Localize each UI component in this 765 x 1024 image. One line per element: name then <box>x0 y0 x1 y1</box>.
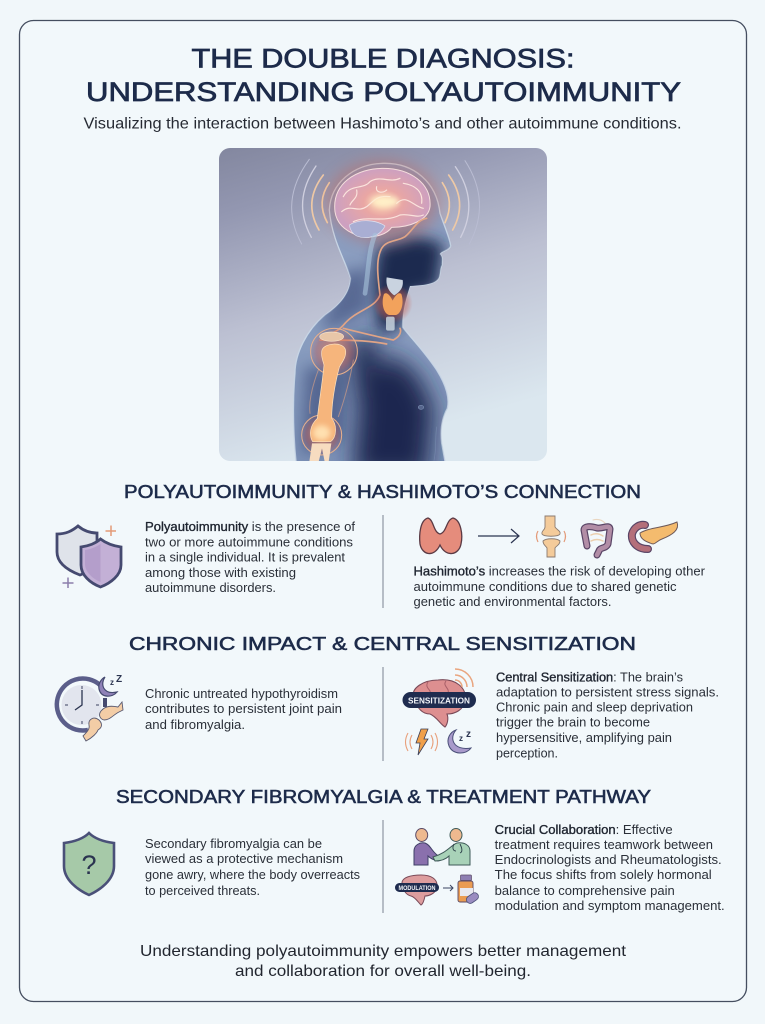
arrow: thyroid to organs <box>478 529 519 543</box>
text: Hashimoto's risk: Hashimoto’s increases the risk of developing other <box>414 564 706 578</box>
illustration: human figure with brain, thyroid and joints <box>219 148 547 477</box>
text: chronic hypothyroidism <box>145 687 342 732</box>
text: polyautoimmunity definition: Polyautoimmunity is the presence of <box>145 520 355 534</box>
text: polyautoimmunity definition <box>145 520 355 595</box>
subtitle: Visualizing the interaction between Hashimoto’s and other autoimmune conditions. <box>84 116 682 132</box>
section heading: connection: POLYAUTOIMMUNITY & HASHIMOTO’S CONNECTION <box>124 482 641 502</box>
text: secondary fibromyalgia: to perceived threats. <box>145 884 260 898</box>
text: Hashimoto's risk: genetic and environmental factors. <box>414 595 612 609</box>
text: central sensitization: Central Sensitization: The brain’s <box>496 670 683 684</box>
icon: doctor and patient handshake <box>414 828 470 865</box>
nerve pathway <box>310 218 427 417</box>
closing statement <box>140 943 627 980</box>
icon: thyroid <box>420 518 462 554</box>
icon: sensitized brain badge <box>402 669 476 755</box>
text: secondary fibromyalgia: viewed as a protective mechanism <box>145 852 343 866</box>
title <box>86 44 681 107</box>
text: crucial collaboration: The focus shifts from solely hormonal <box>495 868 712 882</box>
text: central sensitization: perception. <box>496 746 558 760</box>
icon: intestines <box>584 519 610 555</box>
closing statement: and collaboration for overall well-being. <box>235 963 531 980</box>
text: central sensitization: Chronic pain and sleep deprivation <box>496 700 693 714</box>
text: central sensitization: adaptation to persistent stress signals. <box>496 686 719 700</box>
text: crucial collaboration: Crucial Collaboration : Effective <box>495 823 673 837</box>
dark inner shading <box>302 237 443 477</box>
text: crucial collaboration: treatment requires teamwork between <box>495 838 713 852</box>
title: THE DOUBLE DIAGNOSIS: <box>192 44 574 74</box>
text: crucial collaboration <box>495 823 725 913</box>
closing statement: Understanding polyautoimmunity empowers better management <box>140 943 627 960</box>
text: secondary fibromyalgia <box>145 837 360 898</box>
text: chronic hypothyroidism: and fibromyalgia. <box>145 718 245 732</box>
text: crucial collaboration: balance to comprehensive pain <box>495 884 675 898</box>
text: polyautoimmunity definition: two or more autoimmune conditions <box>145 536 353 550</box>
chest detail <box>418 405 437 461</box>
icon: overlapping shields <box>57 526 121 588</box>
text: central sensitization: hypersensitive, amplifying pain <box>496 731 672 745</box>
thyroid gland <box>373 277 413 331</box>
text: Hashimoto's risk: autoimmune conditions due to shared genetic <box>414 580 677 594</box>
icon: pancreas <box>632 522 678 549</box>
arm bones <box>310 344 346 442</box>
shoulder joint <box>309 327 359 377</box>
icon: shield with question mark <box>64 833 114 895</box>
text: central sensitization <box>496 670 719 760</box>
icon: clock, moon and joint: Z <box>116 674 122 685</box>
text: secondary fibromyalgia: Secondary fibromyalgia can be <box>145 837 322 851</box>
text: crucial collaboration: Endocrinologists and Rheumatologists. <box>495 853 722 867</box>
elbow joint <box>300 413 343 457</box>
icon: clock, moon and joint: z <box>110 678 114 687</box>
text: secondary fibromyalgia: gone awry, where the body overreacts <box>145 868 360 882</box>
brain <box>326 160 439 243</box>
section heading: fibromyalgia: SECONDARY FIBROMYALGIA & TREATMENT PATHWAY <box>116 787 651 807</box>
icon: sensitized brain badge: z <box>459 734 463 743</box>
text: crucial collaboration: modulation and symptom management. <box>495 899 725 913</box>
text: polyautoimmunity definition: among those with existing <box>145 566 296 580</box>
icon: sensitized brain badge: SENSITIZATION <box>408 696 470 706</box>
text: polyautoimmunity definition: autoimmune disorders. <box>145 581 276 595</box>
icon: brain modulation and medicine: MODULATION <box>398 885 436 892</box>
spinal cord <box>365 235 375 293</box>
divider <box>382 515 384 913</box>
icon: brain modulation and medicine <box>395 875 480 905</box>
icon: knee joint <box>536 516 566 557</box>
text: Hashimoto's risk <box>414 564 706 609</box>
text: chronic hypothyroidism: contributes to persistent joint pain <box>145 702 342 716</box>
icon: shield with question mark: ? <box>81 850 97 880</box>
body silhouette <box>294 163 451 462</box>
text: central sensitization: trigger the brain to become <box>496 716 650 730</box>
icon: clock, moon and joint <box>57 674 123 741</box>
text: chronic hypothyroidism: Chronic untreated hypothyroidism <box>145 687 338 701</box>
sound waves around the head <box>292 159 480 244</box>
title: UNDERSTANDING POLYAUTOIMMUNITY <box>86 77 681 107</box>
icon: sensitized brain badge: z <box>466 729 471 740</box>
section heading: chronic impact: CHRONIC IMPACT & CENTRAL SENSITIZATION <box>129 634 636 654</box>
text: polyautoimmunity definition: in a single individual. It is prevalent <box>145 550 345 564</box>
